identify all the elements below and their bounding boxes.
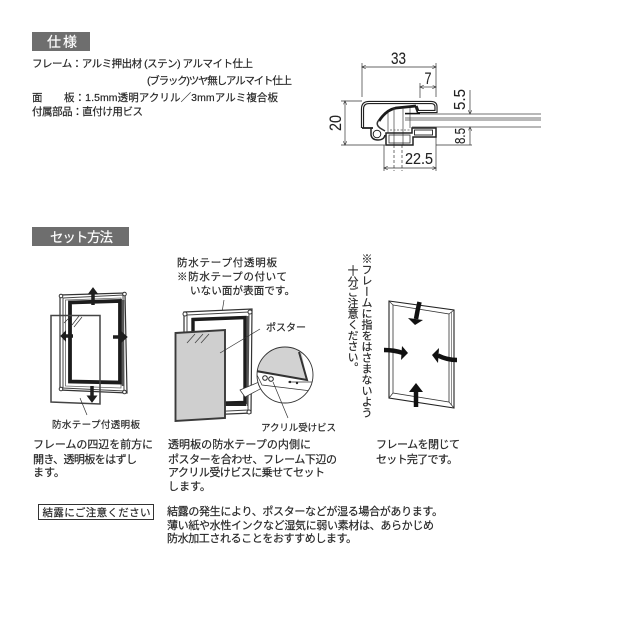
label: 防水テープ付透明板: 防水テープ付透明板 [52, 419, 140, 431]
frame [183, 309, 252, 416]
vertical caution note: ※フレームに指をはさまないよう [360, 253, 372, 418]
dimension: 7 [420, 69, 436, 98]
dimension: 33 [362, 49, 436, 97]
dimension: 20: 20 [326, 115, 345, 131]
text block: step 2: 透明板の防水テープの内側に [168, 437, 311, 451]
text block: step 1: フレームの四辺を前方に [33, 437, 153, 451]
text block: step 2: アクリル受けビスに乗せてセット [168, 466, 325, 479]
illustration: step 3 closing frame [384, 301, 457, 408]
vertical caution note [346, 253, 372, 418]
text block: specifications: 面 [32, 92, 42, 104]
label: アクリル受けビス: アクリル受けビス [261, 422, 336, 434]
text block: step 1: ます。 [33, 466, 65, 479]
dimension: 20 [326, 101, 385, 145]
text block: specifications: 板：1.5mm透明アクリル／3mmアルミ複合板 [64, 91, 278, 104]
dimension: 22.5: 22.5 [405, 151, 433, 168]
dimension: 33: 33 [391, 49, 406, 68]
text block: specifications: (ブラック)ツヤ無しアルマイト仕上 [147, 74, 292, 87]
leader: acrylic screw [273, 382, 288, 418]
text block: step 3: セット完了です。 [376, 453, 458, 466]
leader: poster [220, 329, 260, 353]
text block: step 1: 開き、透明板をはずし [33, 452, 137, 466]
text block: specifications [32, 57, 292, 118]
text block: specifications: フレーム：アルミ押出材 (ステン) アルマイト仕上 [32, 57, 253, 70]
label: waterproof tape note: ※防水テープの付いて [177, 270, 287, 283]
text block: step 3: フレームを閉じて [376, 438, 460, 451]
text block: step 2 [168, 437, 337, 493]
panel layers [405, 114, 541, 127]
dimension: 5.5: 5.5 [452, 89, 469, 110]
label: waterproof tape note: 防水テープ付透明板 [177, 256, 278, 269]
text block: step 1 [33, 437, 153, 479]
detail circle [240, 346, 314, 404]
arrows: four directions [61, 288, 127, 402]
heading: セット方法 [32, 227, 129, 246]
dimension: 8.5 [436, 127, 472, 145]
dimension: 22.5 [384, 137, 436, 171]
poster panel [176, 330, 225, 421]
text block: condensation note: 防水加工されることをおすすめします。 [167, 531, 357, 545]
text block: condensation note [167, 504, 443, 545]
dimension: 8.5: 8.5 [452, 128, 469, 144]
leader line [219, 300, 224, 331]
heading: 仕様 [32, 32, 90, 51]
text block: condensation note: 結露の発生により、ポスターなどが湿る場合があります。 [167, 504, 443, 518]
heading: 仕様: 仕 様 [47, 34, 77, 50]
text block: step 3 [376, 438, 460, 466]
illustration: step 2 inserting poster [176, 300, 336, 434]
text block: condensation note: 薄い紙や水性インクなど湿気に弱い素材は、あらかじめ [167, 518, 434, 532]
dimension: 7: 7 [424, 69, 432, 88]
label: waterproof tape note [177, 256, 295, 297]
callout: condensation label: 結露にご注意ください [42, 506, 150, 519]
frame profile [362, 102, 436, 145]
label: waterproof tape note: いない面が表面です。 [190, 284, 295, 297]
text block: specifications: 付属部品：直付け用ビス [32, 105, 143, 118]
leader line [80, 398, 87, 415]
illustration: step 1 opening frame [51, 288, 140, 431]
frame [59, 292, 127, 394]
label: ポスター: ポスター [266, 322, 306, 334]
arrows: closing inward [384, 302, 457, 407]
text block: step 2: ポスターを合わせ、フレーム下辺の [168, 453, 337, 466]
frame [389, 301, 454, 408]
heading: セット方法: セット方法 [50, 230, 114, 245]
transparent panel [51, 316, 100, 404]
vertical caution note: 十分ご注意ください。 [346, 264, 358, 373]
chart: frame cross-section with dimensions [326, 49, 541, 171]
text block: step 2: します。 [168, 480, 211, 493]
